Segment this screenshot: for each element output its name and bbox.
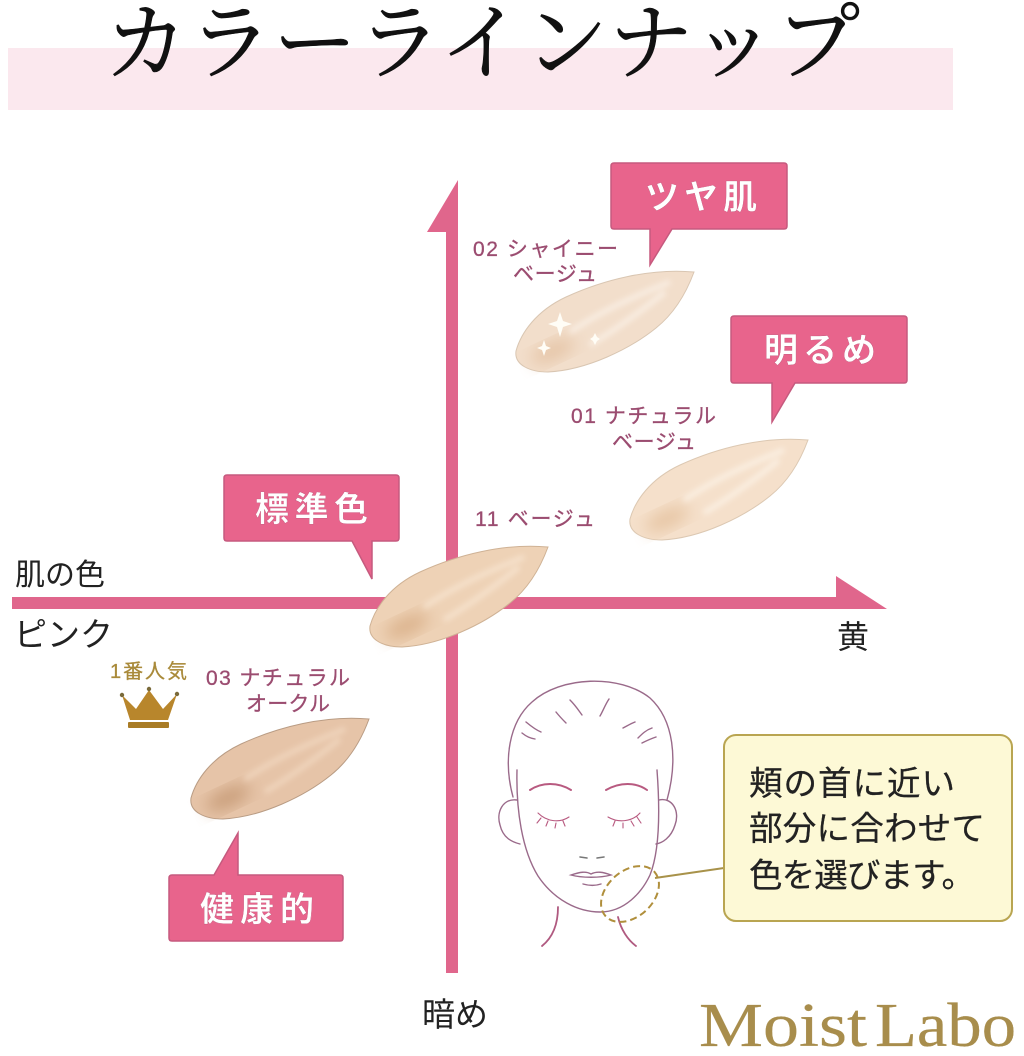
note box: 部分に合わせて (749, 811, 985, 848)
axis label: skin colour: 肌の色 (15, 559, 105, 592)
dashed cheek marker (590, 855, 670, 933)
callout: standard colour: 標準色 (255, 491, 368, 529)
face illustration (499, 681, 677, 946)
swatch: 03 natural ochre (191, 718, 369, 819)
hairlines (522, 699, 656, 743)
icon: crown (120, 687, 179, 728)
nose (580, 857, 604, 858)
callout: standard colour (224, 475, 399, 579)
brows (530, 784, 647, 790)
note box: 色を選びます。 (749, 858, 975, 895)
shade name: 01: ベージュ (612, 431, 696, 454)
badge: most popular: 1番人気 (110, 660, 187, 683)
callout: glossy skin (611, 163, 787, 265)
axis label: dark: 暗め (422, 996, 488, 1033)
head outline (508, 681, 673, 800)
brand logo (699, 992, 1016, 1056)
shade name: 01: 01 ナチュラル (571, 405, 716, 428)
vertical axis arrow (427, 180, 458, 973)
shade name: 02 (473, 238, 618, 286)
horizontal axis arrow (12, 576, 887, 609)
shade name: 03 (206, 667, 350, 716)
closed eyes (537, 813, 641, 828)
ears (499, 800, 677, 844)
callout: glossy skin: ツヤ肌 (645, 179, 757, 217)
callout: brighter (731, 316, 907, 422)
shade name: 02: 02 シャイニー (473, 238, 618, 261)
callout: healthy (169, 833, 343, 941)
leader line (655, 868, 724, 878)
badge: most popular (110, 660, 187, 728)
shade name: 03: 03 ナチュラル (206, 667, 350, 690)
title: カラーラインナップ (104, 0, 860, 91)
swatch: 11 beige (370, 546, 548, 647)
note box: 頬の首に近い (749, 766, 955, 803)
shade name: 02: ベージュ (513, 263, 597, 286)
swatch: 01 natural beige (630, 439, 808, 540)
icon: sparkles (537, 312, 600, 356)
swatch: 02 shiny beige (516, 271, 694, 372)
lips (571, 872, 611, 886)
shade name: 11: 11 ベージュ (475, 508, 595, 531)
shade name: 01 (571, 405, 716, 454)
callout: healthy: 健康的 (200, 891, 314, 929)
neck (542, 907, 636, 946)
face outline (517, 770, 659, 912)
axis label: pink: ピンク (14, 616, 113, 653)
shade name: 03: オークル (246, 693, 330, 716)
note box (724, 735, 1012, 921)
callout: brighter: 明るめ (764, 332, 876, 370)
title band (8, 48, 953, 110)
axis label: yellow: 黄 (837, 619, 869, 655)
